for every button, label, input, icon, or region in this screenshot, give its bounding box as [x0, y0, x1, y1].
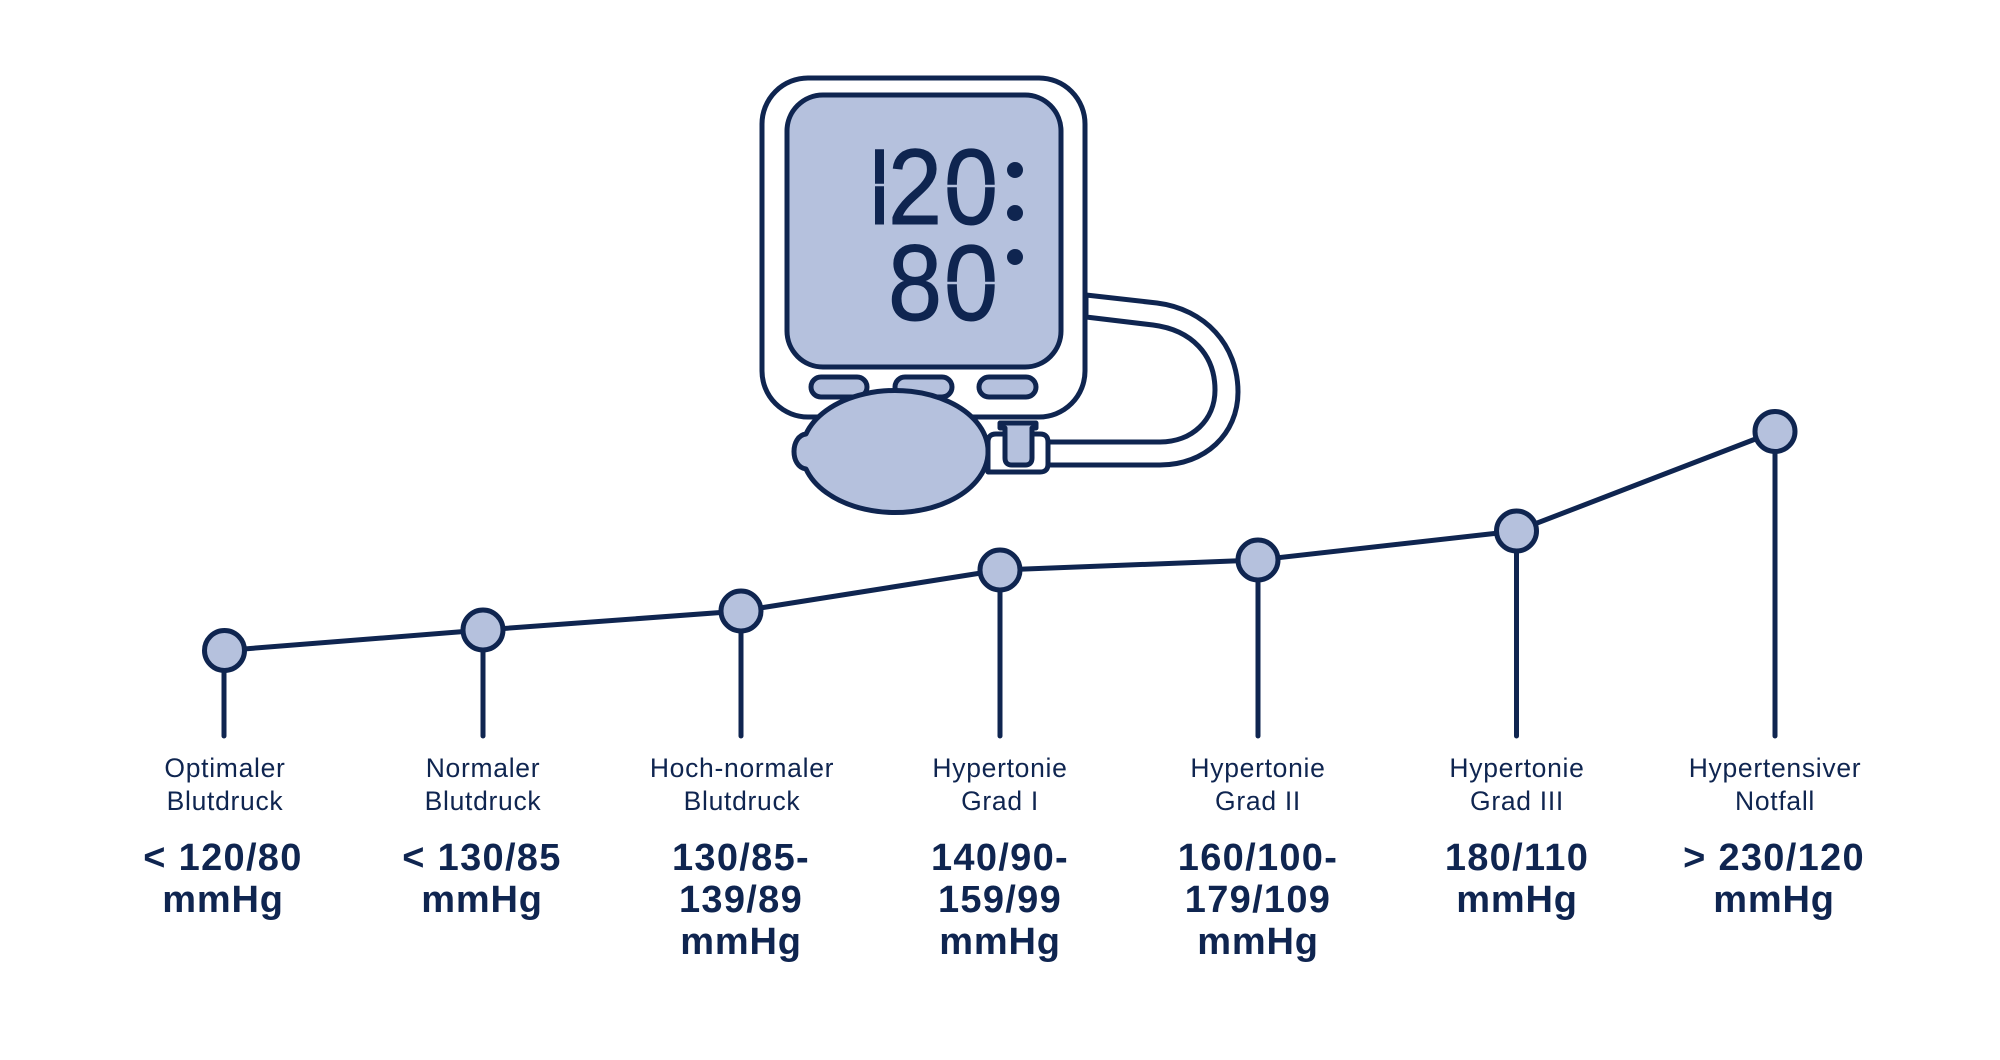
stems — [224, 431, 1775, 736]
monitor button 3 — [979, 377, 1036, 397]
category: Normaler Blutdruck: < 130/85 — [402, 837, 562, 879]
category: Hypertonie Grad I: Grad I — [961, 786, 1039, 816]
icon: valve — [1000, 423, 1036, 465]
category: Normaler Blutdruck: Normaler — [426, 753, 540, 783]
reading: systolic 120: 1 — [845, 126, 905, 247]
category: Hypertonie Grad II: mmHg — [1197, 921, 1319, 963]
category: Hypertonie Grad II: Hypertonie — [1190, 753, 1326, 783]
category: Hypertensiver Notfall: Hypertensiver — [1689, 753, 1861, 783]
category: Hypertonie Grad I: Hypertonie — [932, 753, 1068, 783]
category: Optimaler Blutdruck: < 120/80 — [143, 837, 303, 879]
category: Hoch-normaler Blutdruck: 130/85- — [672, 837, 810, 879]
reading: diastolic 80 — [888, 222, 998, 343]
reading: systolic 120 — [875, 148, 995, 226]
category: Hypertonie Grad I: 159/99 — [938, 879, 1062, 921]
category: Normaler Blutdruck: Blutdruck — [425, 786, 541, 816]
data points — [204, 412, 1795, 670]
category: Hypertonie Grad II: 179/109 — [1185, 879, 1331, 921]
category: Hoch-normaler Blutdruck: Blutdruck — [684, 786, 800, 816]
reading: diastolic 80: 8 — [888, 222, 942, 343]
category: Normaler Blutdruck — [402, 753, 562, 921]
category: Hypertensiver Notfall: mmHg — [1713, 879, 1835, 921]
monitor screen — [787, 95, 1061, 367]
reading: systolic 120: 0 — [944, 126, 998, 247]
category: Hypertonie Grad III: Hypertonie — [1449, 753, 1585, 783]
category: Hypertensiver Notfall: > 230/120 — [1683, 837, 1865, 879]
icon: bulb connector — [988, 434, 1048, 472]
monitor button 2 — [895, 377, 952, 397]
category: Hypertonie Grad I — [931, 753, 1069, 963]
category: Normaler Blutdruck: mmHg — [421, 879, 543, 921]
reading: systolic 120: 2 — [888, 126, 942, 247]
category: Hypertonie Grad II — [1178, 753, 1338, 963]
category: Hypertonie Grad I: mmHg — [939, 921, 1061, 963]
monitor button 1 — [811, 377, 867, 397]
icon: air tube — [1046, 295, 1238, 465]
icon: inflation bulb — [794, 390, 988, 512]
category: Hypertonie Grad III: Grad III — [1470, 786, 1564, 816]
line chart — [204, 412, 1795, 736]
category: Hypertensiver Notfall — [1683, 753, 1865, 921]
category: Hypertensiver Notfall: Notfall — [1735, 786, 1815, 816]
category: Hypertonie Grad I: 140/90- — [931, 837, 1069, 879]
category: Optimaler Blutdruck: Blutdruck — [167, 786, 283, 816]
monitor body — [762, 78, 1085, 417]
category: Hypertonie Grad III — [1445, 753, 1589, 921]
category: Hoch-normaler Blutdruck: mmHg — [680, 921, 802, 963]
reading dots — [1007, 162, 1023, 265]
category: Optimaler Blutdruck: Optimaler — [164, 753, 286, 783]
category: Hoch-normaler Blutdruck: Hoch-normaler — [650, 753, 834, 783]
reading: diastolic 80: 0 — [944, 222, 998, 343]
category: Hypertonie Grad II: Grad II — [1215, 786, 1301, 816]
category: Optimaler Blutdruck — [143, 753, 303, 921]
category: Hoch-normaler Blutdruck: 139/89 — [679, 879, 803, 921]
trend line — [224, 432, 1775, 650]
category: Optimaler Blutdruck: mmHg — [162, 879, 284, 921]
category: Hypertonie Grad III: mmHg — [1456, 879, 1578, 921]
icon: blood pressure monitor — [762, 78, 1238, 512]
category: Hypertonie Grad III: 180/110 — [1445, 837, 1589, 879]
category: Hoch-normaler Blutdruck — [650, 753, 834, 963]
category: Hypertonie Grad II: 160/100- — [1178, 837, 1338, 879]
